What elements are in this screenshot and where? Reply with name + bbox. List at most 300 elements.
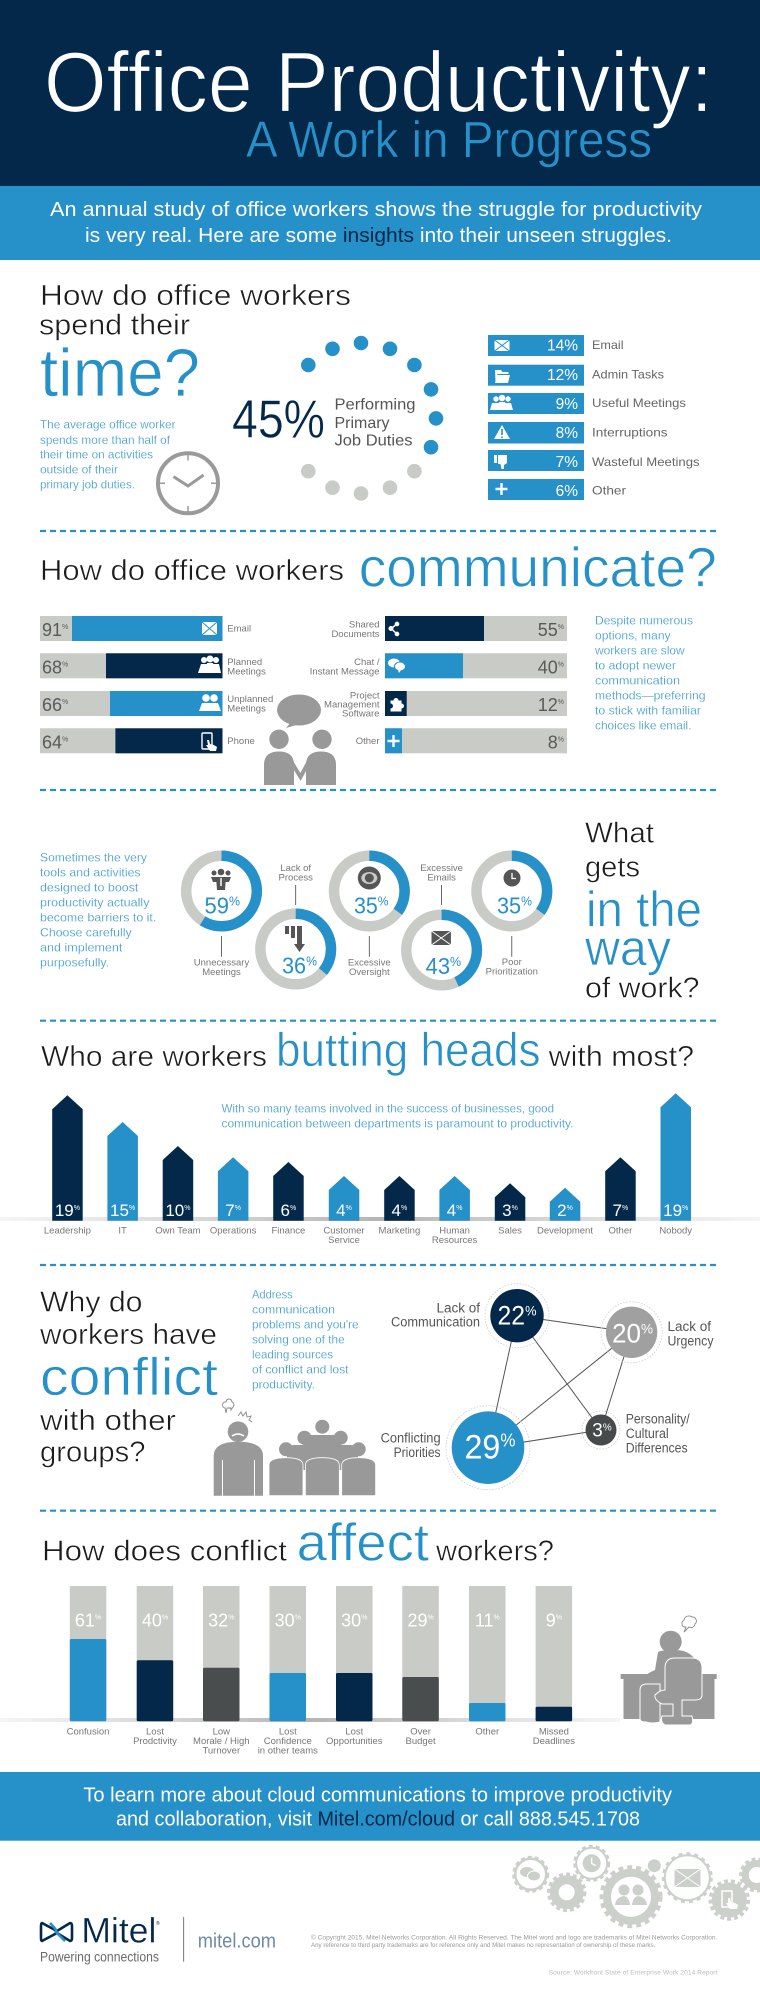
- labels: Meetings: [227, 703, 266, 714]
- values: 55: [538, 620, 558, 640]
- values: %: [558, 624, 564, 631]
- label: primary job duties: Performing: [334, 397, 416, 414]
- call to action text: To learn more about cloud communications to improve productivity: [83, 1785, 672, 1807]
- column values: 40: [142, 1611, 162, 1631]
- bar labels: Finance: [271, 1226, 305, 1237]
- column values: %: [494, 1615, 500, 1622]
- stat: 45 percent: 45%: [232, 390, 325, 450]
- column labels: Confidence: [264, 1736, 312, 1747]
- donut: unnecessary meetings 59: %: [229, 893, 240, 908]
- bar labels: Nobody: [659, 1226, 692, 1237]
- icon: chat: [388, 658, 406, 673]
- panel: how workers communicate: [40, 536, 717, 785]
- node labels: Differences: [626, 1440, 688, 1455]
- text: teams involved: [222, 1101, 574, 1130]
- heading: conflict: Why do: [40, 1287, 142, 1319]
- bar labels: Marketing: [379, 1226, 420, 1237]
- text: address communication: communication: [252, 1303, 335, 1317]
- column values: %: [427, 1615, 434, 1622]
- column labels: Prodctivity: [133, 1736, 177, 1747]
- icon: share: [389, 622, 399, 636]
- labels: [227, 624, 273, 747]
- values and labels: [547, 338, 700, 500]
- labels: Shared: [349, 620, 380, 631]
- icon: clock: [504, 870, 520, 886]
- values: 91: [42, 620, 62, 640]
- labels: Other: [356, 736, 380, 747]
- column labels: [67, 1727, 575, 1756]
- values and labels: Other: [592, 484, 626, 498]
- panel: butting heads: [0, 1023, 760, 1246]
- values and labels: 14%: [547, 338, 578, 354]
- icon: steam cloud: [682, 1616, 696, 1632]
- node: lack of urgency: 20: [612, 1319, 642, 1349]
- bar values: %: [682, 1205, 688, 1212]
- text: communication methods: Despite numerous: [595, 614, 693, 628]
- values: %: [558, 661, 564, 668]
- icon: mail: [494, 340, 510, 351]
- bar values: %: [512, 1205, 518, 1212]
- icon: folder: [495, 370, 510, 383]
- icon: mail: [432, 931, 451, 945]
- column labels: Low: [213, 1727, 230, 1738]
- heading: conflict: workers have: [39, 1319, 217, 1351]
- copyright: [311, 1934, 718, 1949]
- text: barriers: purposefully.: [40, 955, 109, 969]
- icon: meeting person: [211, 869, 231, 890]
- icon: people: [490, 395, 513, 410]
- bar labels: Other: [609, 1226, 632, 1237]
- bar values: %: [401, 1205, 407, 1212]
- bar chart: left channels: [40, 616, 273, 753]
- icon: clock: [158, 453, 218, 513]
- heading: in the way: of work?: [585, 973, 700, 1005]
- heading: butting heads: Who are workers: [41, 1041, 267, 1073]
- values and labels: 12%: [547, 367, 578, 384]
- donut: lack of process 36: 36: [282, 952, 308, 978]
- gear: mail: [663, 1854, 711, 1902]
- gear: partial: [741, 1859, 760, 1891]
- bar labels: Human: [439, 1226, 470, 1237]
- bar chart: right channels: [310, 616, 567, 753]
- values: %: [62, 699, 68, 706]
- heading: communicate: [40, 536, 717, 599]
- column values: 61: [75, 1611, 95, 1631]
- node: lack of communication: [490, 1289, 544, 1342]
- values and labels: 7%: [556, 454, 578, 471]
- bar values: 15: [110, 1201, 129, 1220]
- column labels: Other: [475, 1727, 499, 1738]
- column labels: Deadlines: [533, 1736, 575, 1747]
- text: address communication: leading sources: [252, 1348, 333, 1362]
- values: %: [62, 661, 68, 668]
- label: primary job duties: Primary: [334, 415, 390, 432]
- node: conflicting priorities: [452, 1411, 524, 1484]
- bar values: 10: [165, 1201, 184, 1220]
- node labels: Lack of: [668, 1319, 711, 1334]
- text: barriers: Sometimes the very: [40, 850, 147, 864]
- node: personality differences: [586, 1414, 616, 1446]
- node: conflicting priorities: 29: [464, 1428, 502, 1466]
- donut labels: Lack of: [280, 863, 311, 874]
- node labels: Conflicting: [381, 1431, 441, 1446]
- bar labels: Resources: [432, 1235, 478, 1246]
- bar values: %: [74, 1205, 80, 1212]
- bar values: %: [290, 1205, 296, 1212]
- donut labels: Meetings: [202, 967, 241, 978]
- values: %: [62, 736, 68, 743]
- donut: excessive oversight 35: %: [378, 893, 389, 908]
- donut: unnecessary meetings 59: [186, 856, 257, 926]
- donut charts: [186, 856, 547, 985]
- heading: in the way: [584, 818, 702, 1005]
- node labels: Lack of: [436, 1300, 480, 1315]
- call to action text line two: and collaboration, visit Mitel.com/cloud or call 888.545.1708: [116, 1809, 640, 1831]
- heading: butting heads: [41, 1023, 694, 1076]
- text: barriers: [40, 850, 156, 969]
- heading: in the way: in the: [586, 882, 702, 938]
- text: barriers: designed to boost: [40, 880, 139, 894]
- panel: how workers spend time: [39, 280, 700, 513]
- heading: spend time: time?: [40, 335, 200, 411]
- bar values: 4: [447, 1201, 456, 1220]
- heading: communicate: communicate?: [359, 536, 717, 599]
- values: 12: [538, 695, 558, 715]
- values and labels: 9%: [556, 396, 578, 413]
- bar labels: Development: [537, 1226, 593, 1237]
- donut: excessive emails 43: 43: [426, 953, 451, 979]
- leader lines: [222, 885, 512, 957]
- donut labels: Prioritization: [486, 966, 538, 977]
- arrow bar chart: [44, 1093, 692, 1246]
- bar labels: Operations: [210, 1226, 257, 1237]
- text: barriers: tools and activities: [40, 865, 141, 879]
- labels: [310, 620, 380, 747]
- column values: %: [295, 1615, 301, 1622]
- labels: Chat /: [354, 657, 380, 668]
- text: average office worker: primary job duties.: [40, 478, 135, 492]
- panel: how conflict affects workers: [0, 1514, 717, 1756]
- text: barriers: Choose carefully: [40, 925, 132, 939]
- bar values: %: [622, 1205, 628, 1212]
- donut: lack of process 36: %: [306, 953, 317, 968]
- icon: plus: [496, 483, 508, 495]
- icon: puzzle: [390, 698, 404, 712]
- source: Source: Workfront State of Enterprise Work 2014 Report: [549, 1970, 718, 1977]
- donut icons: [211, 866, 520, 952]
- column values: %: [162, 1615, 168, 1622]
- node labels: Priorities: [394, 1445, 441, 1460]
- icon: person at desk: [621, 1616, 717, 1725]
- text: barriers: become barriers to it.: [40, 910, 156, 924]
- subtitle: A Work in Progress: [246, 111, 652, 168]
- text: teams involved: With so many teams involved in the success of businesses, good: [222, 1101, 554, 1115]
- donut labels: Process: [279, 872, 313, 883]
- column labels: Morale / High: [193, 1736, 250, 1747]
- dot ring chart: [232, 336, 443, 501]
- node labels: Personality/: [626, 1412, 690, 1427]
- node labels: Communication: [391, 1315, 480, 1330]
- column labels: Opportunities: [326, 1736, 383, 1747]
- heading: in the way: gets: [585, 852, 640, 884]
- values and labels: Wasteful Meetings: [592, 455, 700, 469]
- values: 8: [548, 732, 558, 752]
- donut: excessive emails 43: [406, 915, 477, 985]
- bars: time breakdown: [488, 335, 700, 500]
- bar labels: Own Team: [155, 1226, 201, 1237]
- column values: 30: [275, 1611, 295, 1631]
- bar values: %: [129, 1205, 135, 1212]
- bar values: 2: [557, 1201, 567, 1220]
- heading: conflict: conflict: [40, 1348, 218, 1407]
- icon: planned meetings people: [198, 656, 221, 673]
- icon: mail: [202, 622, 217, 635]
- donut: excessive emails 43: %: [450, 954, 462, 969]
- bar values: 4: [392, 1201, 401, 1220]
- labels: Email: [227, 624, 251, 635]
- column labels: Budget: [406, 1736, 436, 1747]
- tagline: Powering connections: [40, 1950, 159, 1965]
- panel: what gets in the way: [40, 818, 702, 1005]
- values: %: [62, 624, 68, 631]
- donut: excessive oversight 35: [334, 856, 405, 926]
- column values: %: [361, 1615, 367, 1622]
- heading: butting heads: with most?: [548, 1041, 694, 1073]
- bar values: 4: [336, 1201, 346, 1220]
- labels: Planned: [227, 657, 262, 668]
- bar labels: Sales: [498, 1226, 522, 1237]
- column values: %: [95, 1615, 101, 1622]
- heading: affect: workers?: [435, 1536, 554, 1568]
- column values: 9: [546, 1611, 556, 1631]
- labels: Documents: [331, 629, 380, 640]
- text: teams involved: communication between departments is paramount to productivity.: [222, 1116, 574, 1130]
- text: communication methods: to stick with familiar: [595, 704, 701, 718]
- donut: poor prioritization 35: %: [521, 893, 532, 908]
- text: average office worker: their time on activities: [40, 448, 153, 462]
- bar values: %: [456, 1205, 462, 1212]
- bar values: 3: [502, 1201, 512, 1220]
- text: address communication: of conflict and lost: [252, 1363, 349, 1377]
- values: 40: [538, 657, 558, 677]
- gear: dot: [648, 1859, 661, 1872]
- icon: eye: [358, 866, 381, 890]
- node labels: Urgency: [668, 1333, 714, 1348]
- icon: warning: [494, 425, 510, 439]
- label: primary job duties: [334, 397, 416, 450]
- column chart: [67, 1586, 575, 1756]
- header panel: [0, 0, 760, 186]
- title: Office Productivity:: [44, 36, 713, 130]
- values: %: [558, 736, 564, 743]
- heading: conflict: [39, 1287, 218, 1469]
- intro text: An annual study of office workers shows the struggle for productivity: [50, 198, 703, 221]
- heading: affect: [42, 1514, 554, 1573]
- text: address communication: [252, 1288, 359, 1392]
- bar values: 7: [225, 1201, 235, 1220]
- icon: two people talking: [264, 694, 336, 785]
- column values: [75, 1611, 562, 1631]
- column values: %: [556, 1615, 562, 1622]
- text: average office worker: The average office worker: [40, 418, 176, 432]
- heading: in the way: way: [584, 920, 671, 976]
- footer: [40, 1911, 718, 1977]
- node labels: Cultural: [626, 1426, 669, 1441]
- column labels: Missed: [539, 1727, 569, 1738]
- donut: poor prioritization 35: [476, 856, 547, 926]
- logo: Mitel: Mitel: [81, 1911, 156, 1950]
- column values: %: [228, 1615, 234, 1622]
- values: [538, 620, 564, 752]
- logo: Mitel: [41, 1911, 160, 1950]
- heading: conflict: with other: [39, 1405, 176, 1437]
- column values: 29: [407, 1611, 427, 1631]
- node: personality differences: 3: [592, 1421, 603, 1442]
- intro text line two: is very real. Here are some insights into their unseen struggles.: [85, 224, 672, 247]
- bar values: 7: [613, 1201, 622, 1220]
- text: barriers: productivity actually: [40, 895, 150, 909]
- text: address communication: Address: [252, 1288, 293, 1302]
- heading: butting heads: butting heads: [276, 1023, 540, 1076]
- donut labels: Emails: [427, 872, 456, 883]
- labels: Software: [342, 709, 380, 720]
- heading: affect: How does conflict: [42, 1536, 287, 1568]
- node labels: [381, 1300, 714, 1460]
- values: 68: [42, 657, 62, 677]
- bar labels: [44, 1226, 692, 1246]
- bar values: %: [567, 1205, 573, 1212]
- text: barriers: and implement: [40, 940, 123, 954]
- label: primary job duties: Job Duties: [334, 432, 412, 450]
- node: personality differences: %: [603, 1423, 612, 1434]
- icon: thumbs down: [494, 455, 507, 469]
- column labels: Confusion: [67, 1727, 109, 1738]
- donut labels: Oversight: [349, 967, 390, 978]
- values and labels: 6%: [556, 483, 578, 500]
- intro band: [0, 186, 760, 260]
- icon: group of people: [269, 1420, 376, 1496]
- text: address communication: solving one of the: [252, 1333, 345, 1347]
- gear: people: [602, 1867, 660, 1926]
- values: [42, 620, 68, 752]
- network diagram: [381, 1284, 714, 1490]
- text: communication methods: to adopt newer: [595, 659, 676, 673]
- labels: Phone: [227, 736, 255, 747]
- column labels: Over: [410, 1727, 431, 1738]
- text: communication methods: methods—preferring: [595, 689, 706, 703]
- bar values: 19: [55, 1201, 74, 1220]
- column labels: in other teams: [258, 1745, 318, 1756]
- donut labels: Excessive: [348, 958, 391, 969]
- gear: chat: [514, 1857, 548, 1891]
- text: communication methods: communication: [595, 674, 680, 688]
- donut: lack of process 36: [260, 914, 331, 984]
- heading: communicate: How do office workers: [40, 555, 344, 587]
- column labels: Turnover: [202, 1745, 240, 1756]
- labels: Unplanned: [227, 694, 273, 705]
- donut labels: Excessive: [420, 863, 463, 874]
- icon: unplanned meetings people: [199, 694, 221, 711]
- bar labels: Customer: [323, 1226, 365, 1237]
- icon: frustrated person: [214, 1399, 263, 1496]
- bar labels: Service: [328, 1235, 360, 1246]
- text: average office worker: outside of their: [40, 462, 118, 476]
- bar values: %: [346, 1205, 352, 1212]
- column values: 11: [475, 1611, 494, 1631]
- donut: unnecessary meetings 59: 59: [204, 892, 230, 918]
- icon: phone: [202, 733, 217, 751]
- values and labels: Admin Tasks: [592, 368, 664, 382]
- heading: in the way: What: [585, 818, 654, 850]
- logo: Mitel: ®: [156, 1920, 160, 1927]
- donut labels: [194, 863, 538, 978]
- text: address communication: problems and you're: [252, 1318, 359, 1332]
- column labels: Lost: [146, 1727, 164, 1738]
- values and labels: Email: [592, 338, 624, 352]
- icon: plus: [388, 735, 400, 747]
- call to action band: [0, 1772, 760, 1841]
- heading: conflict: groups?: [40, 1437, 146, 1469]
- gear: clock: [575, 1846, 609, 1880]
- bar values: %: [235, 1205, 241, 1212]
- baseline shadow: [0, 1217, 760, 1221]
- column values: 32: [208, 1611, 228, 1631]
- node: lack of communication: %: [525, 1302, 536, 1318]
- bar labels: IT: [118, 1226, 127, 1237]
- labels: Meetings: [227, 666, 266, 677]
- donut labels: Unnecessary: [194, 958, 249, 969]
- baseline shadow: [0, 1718, 620, 1722]
- values: 64: [42, 732, 62, 752]
- heading: affect: affect: [297, 1514, 429, 1573]
- text: communication methods: choices like email.: [595, 719, 692, 733]
- copyright: Any reference to third party trademarks are for reference only and Mitel makes no representation of ownership of these marks.: [311, 1942, 655, 1949]
- website: mitel.com: [198, 1931, 276, 1953]
- bar values: [55, 1201, 688, 1220]
- node: lack of urgency: %: [641, 1321, 653, 1337]
- copyright: © Copyright 2015, Mitel Networks Corporation. All Rights Reserved. The Mitel word and logo are trademarks of Mitel Networks Corporation.: [311, 1934, 718, 1942]
- values: 66: [42, 695, 62, 715]
- column labels: Lost: [345, 1727, 364, 1738]
- gear: phone: [710, 1881, 748, 1919]
- values: %: [558, 699, 564, 706]
- node: conflicting priorities: %: [500, 1430, 516, 1450]
- text: average office worker: spends more than half of: [40, 433, 171, 447]
- text: communication methods: [594, 614, 706, 733]
- column values: 30: [341, 1611, 361, 1631]
- heading: spend time: [39, 280, 351, 411]
- text: communication methods: options, many: [595, 629, 671, 643]
- donut: excessive oversight 35: 35: [354, 892, 380, 918]
- donut: poor prioritization 35: 35: [497, 892, 523, 918]
- text: address communication: productivity.: [252, 1378, 315, 1392]
- values and labels: Interruptions: [592, 426, 668, 440]
- decorative gears: [514, 1846, 760, 1926]
- icon: process bars: [285, 926, 305, 952]
- node: lack of urgency: [606, 1307, 657, 1358]
- column labels: Lost: [279, 1727, 297, 1738]
- text: communication methods: workers are slow: [594, 644, 685, 658]
- labels: Project: [350, 690, 380, 701]
- heading: spend time: spend their: [39, 310, 190, 342]
- panel: why conflict: [39, 1284, 714, 1496]
- heading: spend time: How do office workers: [40, 280, 351, 312]
- labels: Management: [324, 699, 380, 710]
- bar values: %: [184, 1205, 190, 1212]
- donut labels: Poor: [502, 957, 522, 968]
- gear: solid: [549, 1874, 585, 1910]
- values and labels: 8%: [556, 425, 578, 442]
